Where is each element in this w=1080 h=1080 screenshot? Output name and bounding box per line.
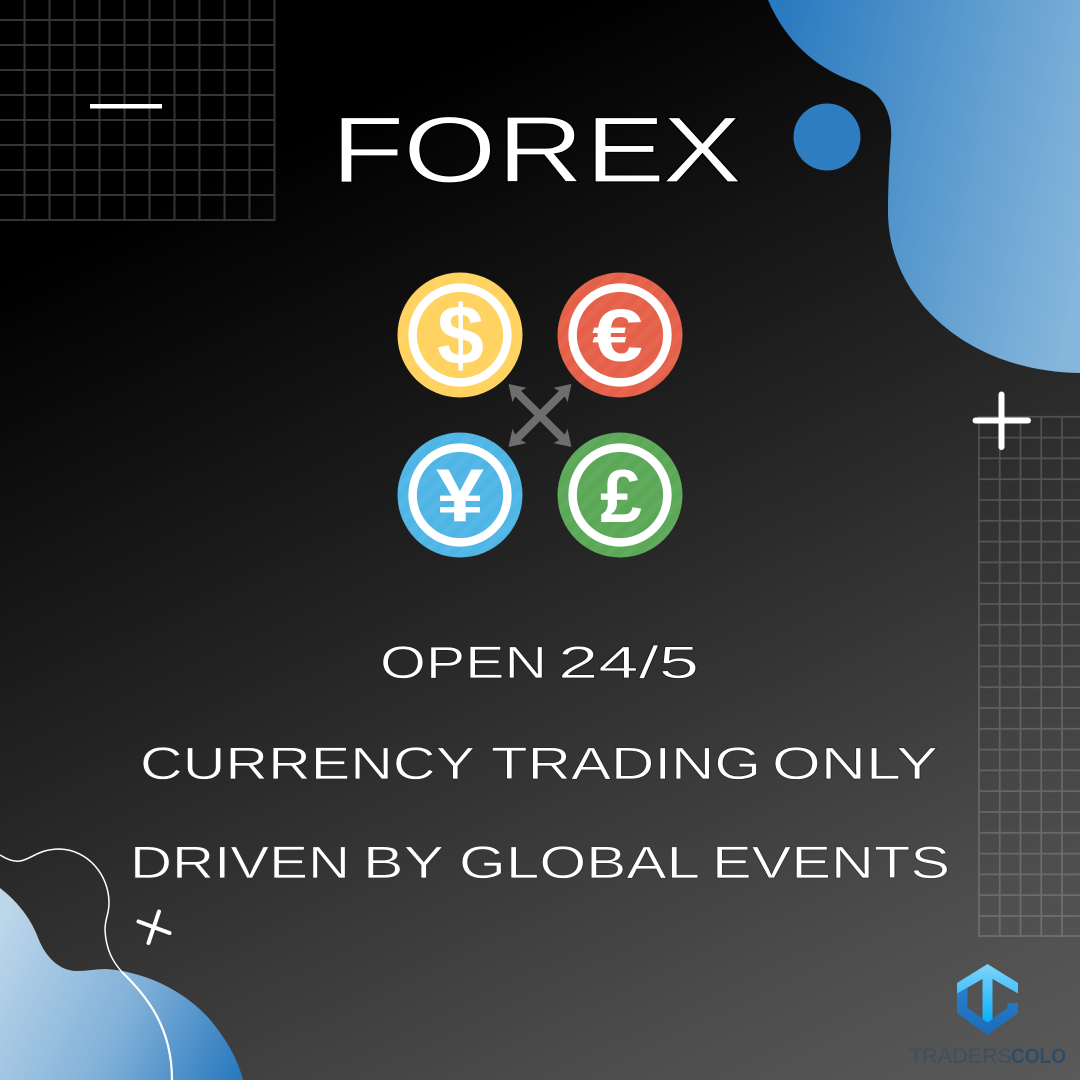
blob: top right	[768, 0, 1080, 373]
accent circle	[794, 104, 860, 170]
coin: dollar: $	[437, 288, 484, 382]
arrows: crossing exchange	[501, 377, 579, 454]
text: open 24/5: OPEN	[380, 637, 547, 688]
title: FOREX	[331, 97, 742, 202]
coin: dollar	[398, 272, 522, 398]
decorative white curve	[0, 849, 172, 1080]
coin: yen	[398, 432, 522, 558]
logo: traders colo	[909, 964, 1066, 1068]
text: driven by global events: BY	[363, 837, 444, 888]
accent cross	[138, 912, 170, 943]
text: open 24/5	[380, 637, 699, 688]
text: driven by global events: DRIVEN	[130, 837, 350, 888]
coin: euro: €	[592, 294, 643, 377]
accent dash	[90, 104, 162, 108]
text: open 24/5: 24/5	[558, 637, 699, 688]
logo wordmark: COLO	[1011, 1044, 1066, 1068]
text: currency trading only	[140, 738, 938, 789]
icon: currency exchange	[398, 272, 682, 558]
coin: euro	[558, 272, 682, 398]
text: currency trading only: TRADING	[491, 738, 761, 789]
accent plus	[976, 394, 1028, 447]
text: driven by global events: GLOBAL	[459, 837, 700, 888]
grid: right side	[978, 416, 1080, 937]
coin: pound: £	[600, 454, 642, 538]
logo wordmark: TRADERS	[909, 1044, 1012, 1068]
logo mark	[957, 964, 1018, 1035]
blob: bottom left	[0, 888, 243, 1080]
coin: pound	[558, 432, 682, 558]
text: driven by global events	[130, 837, 950, 888]
text: currency trading only: ONLY	[772, 738, 938, 789]
grid: top left	[0, 0, 276, 221]
logo wordmark	[909, 1044, 1066, 1068]
coin: yen: ¥	[436, 453, 484, 537]
text: currency trading only: CURRENCY	[140, 738, 475, 789]
text: driven by global events: EVENTS	[712, 837, 950, 888]
